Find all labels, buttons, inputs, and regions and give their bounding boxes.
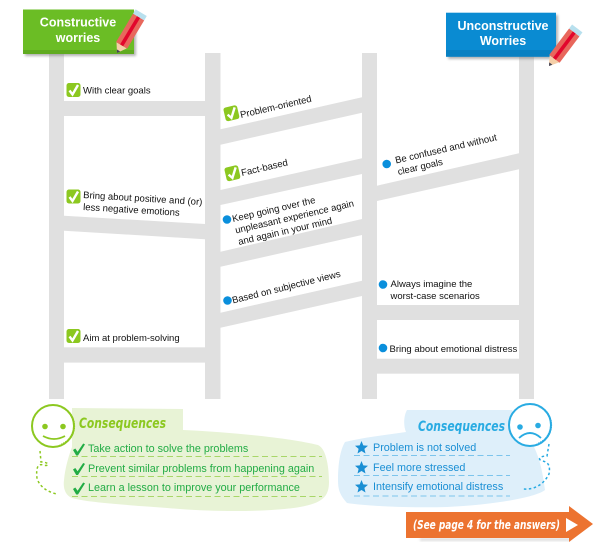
icon: sad face bbox=[509, 404, 551, 446]
item: be confused: clear goals bbox=[397, 157, 444, 178]
item: fact-based bbox=[224, 158, 289, 182]
icon: red pencil bbox=[544, 25, 582, 70]
list: unconstructive outcomes bbox=[354, 441, 510, 496]
item: positive emotions: less negative emotions bbox=[83, 202, 180, 219]
icon: dotted curl bbox=[37, 451, 57, 494]
panel: unconstructive consequences bbox=[338, 404, 551, 507]
item: aim at problem-solving bbox=[66, 329, 180, 344]
item: positive emotions: Bring about positive and (or) bbox=[83, 190, 203, 208]
heading: unconstructive worries: Worries bbox=[480, 34, 526, 48]
heading: constructive worries: worries bbox=[55, 31, 100, 45]
item: be confused: Be confused and without bbox=[394, 132, 498, 166]
item: be confused bbox=[382, 132, 498, 178]
item: aim at problem-solving: Aim at problem-solving bbox=[83, 333, 180, 344]
list: unconstructive outcomes: Problem is not solved bbox=[373, 442, 476, 454]
item: worst-case scenarios: worst-case scenarios bbox=[390, 291, 480, 302]
item: fact-based: Fact-based bbox=[240, 158, 289, 179]
item: subjective views: Based on subjective views bbox=[231, 269, 342, 306]
list: unconstructive outcomes: Feel more stressed bbox=[373, 462, 465, 474]
icon: smiling face bbox=[32, 405, 74, 447]
item: positive emotions bbox=[66, 190, 203, 219]
item: keep going over: and again in your mind bbox=[237, 216, 333, 248]
arrow: see page 4 bbox=[406, 506, 593, 542]
ladder diagram bbox=[49, 53, 534, 399]
item: emotional distress: Bring about emotional distress bbox=[390, 344, 518, 355]
list: constructive outcomes: Take action to solve the problems bbox=[88, 443, 249, 455]
item: with clear goals: With clear goals bbox=[83, 86, 151, 96]
item: keep going over: unpleasant experience again bbox=[234, 198, 355, 236]
icon: red pencil bbox=[111, 9, 147, 56]
subheading: Consequences bbox=[418, 419, 505, 435]
item: keep going over: Keep going over the bbox=[231, 195, 317, 225]
list: constructive outcomes: Learn a lesson to improve your performance bbox=[88, 482, 300, 494]
item: with clear goals bbox=[66, 83, 151, 97]
heading: unconstructive worries bbox=[446, 13, 582, 70]
panel: constructive consequences bbox=[32, 405, 329, 511]
heading: constructive worries: Constructive bbox=[40, 16, 116, 30]
item: worst-case scenarios: Always imagine the bbox=[390, 279, 472, 290]
list: constructive outcomes: Prevent similar problems from happening again bbox=[88, 463, 314, 475]
list: constructive outcomes bbox=[72, 443, 322, 496]
heading: unconstructive worries: Unconstructive bbox=[458, 19, 549, 33]
item: problem-oriented: Problem-oriented bbox=[239, 94, 313, 121]
icon: dotted curl bbox=[523, 444, 549, 489]
item: worst-case scenarios bbox=[379, 279, 480, 302]
list: unconstructive outcomes: Intensify emotional distress bbox=[373, 481, 504, 493]
item: keep going over bbox=[223, 195, 355, 248]
heading: constructive worries bbox=[23, 9, 147, 56]
subheading: Consequences bbox=[79, 416, 166, 432]
